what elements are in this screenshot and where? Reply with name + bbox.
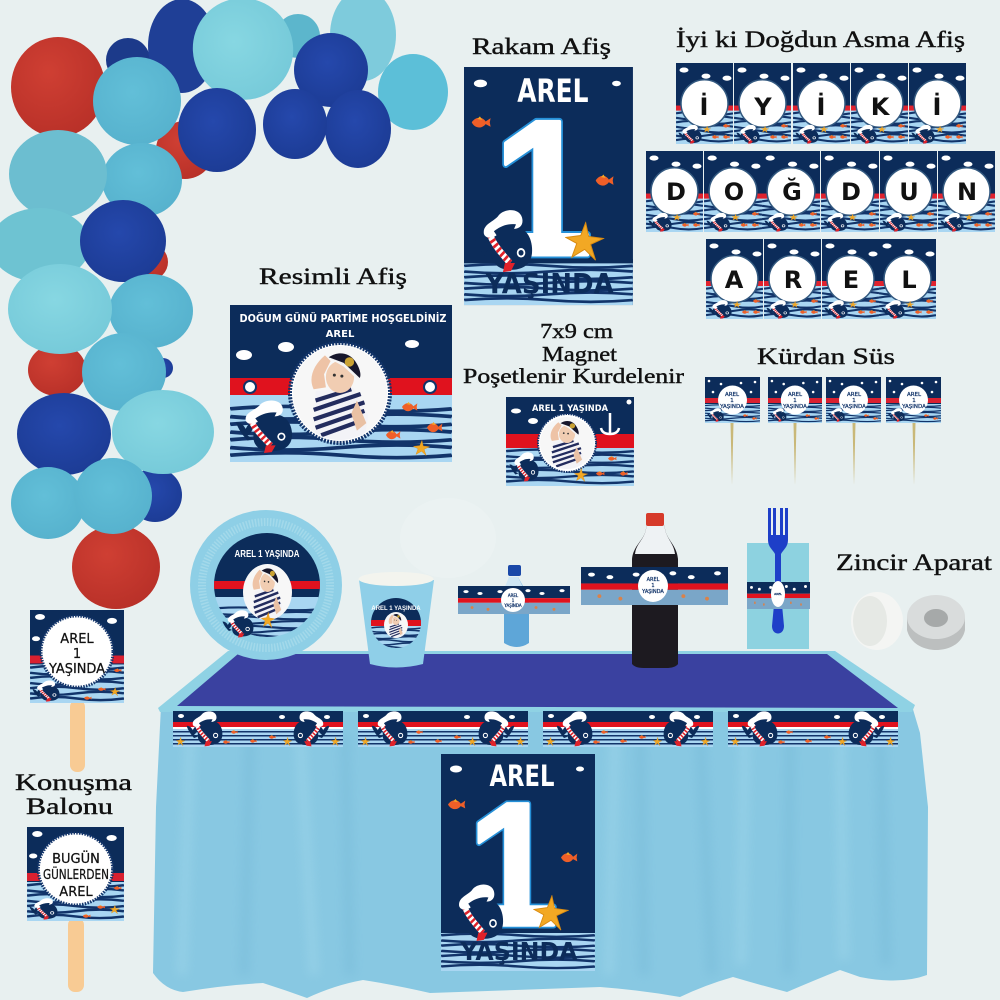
toothpick toppers: YAŞINDA <box>782 404 807 410</box>
speech bubble card: AREL 1 YAŞINDA <box>30 610 124 772</box>
heading: Konuşma Balonu <box>15 770 132 819</box>
number poster: Rakam Afiş: AREL <box>517 72 589 110</box>
balloon arch <box>0 0 448 609</box>
number poster: Rakam Afiş: 1 <box>494 81 592 296</box>
hanging banner: AREL: L <box>901 266 917 294</box>
toothpick toppers: AREL <box>847 392 862 398</box>
heading: Zincir Aparat: Zincir Aparat <box>836 550 993 575</box>
hanging banner: DOĞDUN: D <box>841 178 861 206</box>
number poster: table <box>441 754 595 971</box>
hanging banner: İYİ Kİ: İ <box>700 92 708 121</box>
toothpick toppers: AREL <box>788 392 803 398</box>
heading: Magnet details: Poşetlenir Kurdelenir <box>463 364 684 388</box>
cup: AREL 1 YAŞINDA <box>371 606 421 612</box>
toothpick toppers: AREL <box>725 392 740 398</box>
cola bottle: AREL <box>647 577 660 583</box>
hanging banner: DOĞDUN: D <box>666 178 686 206</box>
glue dot rolls <box>851 592 965 650</box>
toothpick toppers: YAŞINDA <box>719 404 744 410</box>
number poster: Rakam Afiş: YAŞINDA <box>484 269 614 300</box>
cola bottle: YAŞINDA <box>641 589 664 595</box>
hanging banner: DOĞDUN <box>646 151 995 232</box>
hanging banner: AREL: A <box>725 266 744 294</box>
toothpick toppers: YAŞINDA <box>901 404 926 410</box>
hanging banner: AREL: E <box>843 266 859 294</box>
toothpick toppers: 1 <box>852 398 856 404</box>
speech bubble card: BUGÜN GÜNLERDEN AREL <box>27 827 124 992</box>
hanging banner: DOĞDUN: U <box>899 178 919 206</box>
number poster: Rakam Afiş: 1 <box>494 81 592 296</box>
speech bubble card: BUGÜN GÜNLERDEN AREL: AREL <box>59 885 93 900</box>
table skirt <box>153 706 928 998</box>
number poster: table: 1 <box>468 766 558 962</box>
speech bubble card: BUGÜN GÜNLERDEN AREL: BUGÜN <box>52 850 100 867</box>
water bottle <box>458 565 570 647</box>
number poster: table: YAŞINDA <box>460 937 578 966</box>
speech bubble card: BUGÜN GÜNLERDEN AREL: GÜNLERDEN <box>43 866 109 883</box>
cup <box>358 572 434 668</box>
hanging banner: İYİ Kİ: İ <box>817 92 825 121</box>
magnet: AREL 1 YAŞINDA <box>532 404 608 414</box>
water bottle: AREL <box>508 593 519 598</box>
heading: Konuşma Balonu: Konuşma <box>15 770 132 795</box>
speech bubble card: AREL 1 YAŞINDA: 1 <box>73 647 81 662</box>
photo poster: Resimli Afiş <box>230 305 452 462</box>
water bottle: YAŞINDA <box>503 603 522 608</box>
photo poster: Resimli Afiş: AREL <box>326 329 355 340</box>
hanging banner: DOĞDUN: O <box>724 178 744 206</box>
hanging banner: AREL: R <box>784 266 802 294</box>
plate: AREL 1 YAŞINDA <box>234 549 300 560</box>
plate <box>190 510 342 660</box>
toothpick toppers: YAŞINDA <box>841 404 866 410</box>
hanging banner: İYİ Kİ: İ <box>933 92 941 121</box>
speech bubble card: AREL 1 YAŞINDA: YAŞINDA <box>48 662 105 677</box>
photo poster: Resimli Afiş: DOĞUM GÜNÜ PARTİME HOŞGELDİNİZ <box>240 311 447 325</box>
heading: Rakam Afiş: Rakam Afiş <box>472 34 611 59</box>
heading: Magnet details: 7x9 cm <box>540 319 613 343</box>
cola bottle: 1 <box>651 583 655 589</box>
heading: İyi ki Doğdun Asma Afiş: İyi ki Doğdun Asma Afiş <box>676 27 965 52</box>
toothpick toppers: 1 <box>730 398 734 404</box>
hanging banner: İYİ Kİ: K <box>871 93 891 121</box>
toothpick toppers: AREL <box>907 392 922 398</box>
number poster: table: 1 <box>468 766 558 962</box>
number poster: Rakam Afiş <box>464 67 633 305</box>
table border strips <box>173 711 898 747</box>
magnet <box>506 397 634 486</box>
toothpick toppers: 1 <box>793 398 797 404</box>
heading: Konuşma Balonu: Balonu <box>26 794 114 819</box>
hanging banner: İYİ Kİ: Y <box>753 93 772 121</box>
napkin and fork <box>747 508 810 649</box>
heading: Kürdan Süs: Kürdan Süs <box>757 344 895 369</box>
water bottle: 1 <box>512 598 515 603</box>
napkin and fork: AREL <box>774 592 782 596</box>
toothpick toppers <box>705 377 941 485</box>
cola bottle <box>581 513 728 668</box>
table top cover <box>158 651 915 712</box>
speech bubble card: AREL 1 YAŞINDA: AREL <box>60 632 94 647</box>
hanging banner: AREL <box>706 239 936 319</box>
heading: Resimli Afiş: Resimli Afiş <box>259 264 407 289</box>
toothpick toppers: 1 <box>912 398 916 404</box>
heading: Magnet details <box>463 319 684 388</box>
hanging banner: İYİ Kİ <box>676 63 966 144</box>
hanging banner: DOĞDUN: Ğ <box>782 176 802 206</box>
heading: Magnet details: Magnet <box>542 342 617 366</box>
hanging banner: DOĞDUN: N <box>957 178 977 206</box>
number poster: table: AREL <box>490 759 554 793</box>
